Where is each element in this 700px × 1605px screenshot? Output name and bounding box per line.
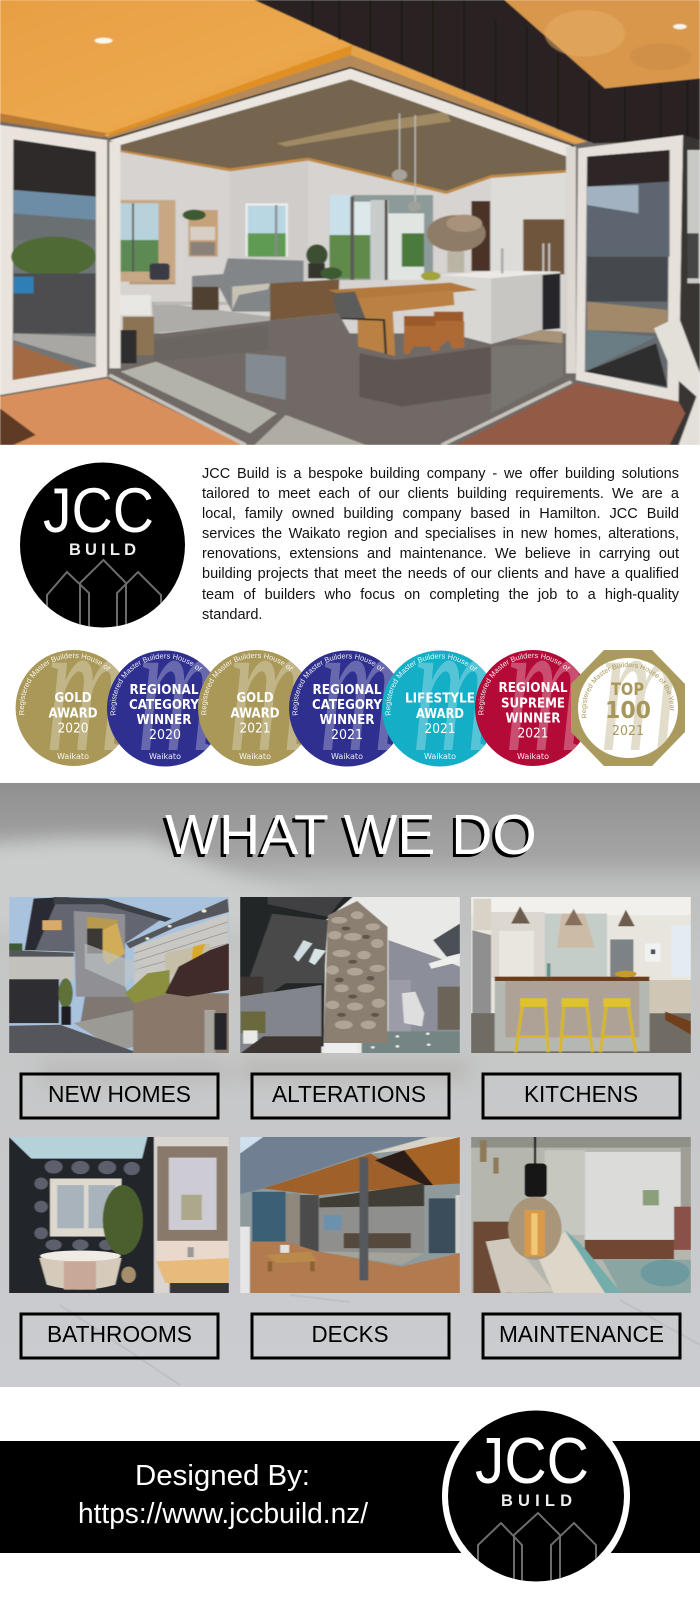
badge: regional supreme winner 2021: WINNER (506, 712, 560, 727)
badge: gold award 2020: GOLD (54, 691, 92, 706)
badge: regional category winner 2020 (107, 650, 211, 766)
interior ceiling (121, 78, 567, 193)
badge: lifestyle award 2021: Waikato (424, 752, 456, 761)
badge: gold award 2020: AWARD (48, 707, 98, 722)
button: kitchens: KITCHENS (524, 1081, 638, 1107)
about text block: standard. (202, 607, 262, 623)
badge: regional supreme winner 2021: REGIONAL (498, 681, 568, 696)
left door (0, 125, 107, 395)
shelf niche (188, 210, 218, 257)
badge: gold award 2021: AWARD (230, 707, 280, 722)
badge: regional category winner 2021: Waikato (331, 752, 363, 761)
about text block: building projects that meet the needs of our clients and have a qualified (202, 566, 679, 582)
sofa (192, 258, 304, 312)
badge: gold award 2020: Registered Master Builders House of (19, 652, 111, 715)
about text block: team of builders who focus on completing the job to a high-quality (202, 587, 679, 603)
button: alterations: ALTERATIONS (272, 1081, 426, 1107)
about text block: JCC Build is a bespoke building company - we offer building solutions (202, 466, 679, 482)
window left (120, 200, 175, 282)
badge: regional category winner 2020: CATEGORY (129, 698, 200, 713)
badge: gold award 2021: 2021 (240, 721, 270, 737)
badge: lifestyle award 2021: AWARD (416, 707, 464, 722)
badge: gold award 2021 (198, 650, 302, 766)
badge: gold award 2021: Registered Master Builders House of (201, 652, 294, 715)
photo: kitchens (471, 897, 691, 1053)
rug (152, 302, 270, 333)
fascia and head frame (350, 45, 587, 144)
about text block: renovations, extensions and maintenance. We believe in carrying out (202, 546, 679, 562)
footer credit text (78, 1460, 369, 1530)
about text block: services the Waikato region and specialises in new homes, alterations, (202, 526, 679, 542)
heading: what we do: WHAT WE DO (165, 803, 537, 867)
badge: top 100 2021: TOP (611, 680, 644, 700)
badge: regional category winner 2020: Registered Master Builders House of (110, 653, 202, 716)
button: bathrooms: BATHROOMS (47, 1321, 192, 1347)
badge: regional supreme winner 2021: 2021 (518, 726, 548, 742)
button: maintenance (483, 1314, 680, 1358)
badge: regional category winner 2021: 2021 (331, 727, 363, 743)
about text block: local, family owned building company based in Hamilton. JCC Build (202, 506, 679, 522)
badge: lifestyle award 2021: 2021 (424, 721, 456, 737)
badge: regional supreme winner 2021: SUPREME (501, 697, 565, 712)
photo: alterations (240, 897, 460, 1053)
button: decks (252, 1314, 449, 1358)
button: bathrooms (21, 1314, 218, 1358)
button: kitchens (483, 1074, 680, 1118)
badge: regional category winner 2020: WINNER (136, 713, 192, 728)
badge: regional supreme winner 2021: Waikato (517, 752, 549, 761)
footer logo: JCC Build: JCC (475, 1424, 589, 1497)
badge: top 100 2021: 2021 (612, 723, 644, 739)
about text block (202, 466, 679, 623)
dark door and fridge (471, 201, 490, 271)
stools (404, 316, 440, 326)
island (440, 272, 560, 344)
logo: JCC Build: BUILD (69, 541, 136, 559)
photo: maintenance (471, 1137, 691, 1293)
footer credit text: Designed By: (135, 1460, 310, 1492)
photo: bathrooms (9, 1137, 229, 1293)
photo: decks (240, 1137, 460, 1293)
badge: regional supreme winner 2021 (475, 650, 580, 766)
badge: lifestyle award 2021: m (412, 582, 492, 792)
right door (576, 135, 683, 402)
badge: lifestyle award 2021: LIFESTYLE (405, 692, 475, 707)
ceiling left (0, 0, 353, 137)
logo: JCC Build: JCC (43, 476, 154, 546)
dining table (328, 283, 478, 302)
button: decks: DECKS (312, 1321, 388, 1347)
badge: gold award 2021: Waikato (239, 752, 271, 761)
logo: JCC Build (20, 462, 185, 630)
footer logo: JCC Build (442, 1402, 630, 1590)
button: new homes (21, 1074, 218, 1118)
badge: regional category winner 2021: REGIONAL (312, 683, 382, 698)
footer credit text: https://www.jccbuild.nz/ (78, 1498, 369, 1530)
badge: lifestyle award 2021 (382, 650, 487, 766)
footer band (0, 1441, 700, 1553)
dark cladding (254, 0, 700, 143)
sliding doors to garden (329, 195, 433, 280)
badge: gold award 2020: Waikato (57, 752, 89, 761)
badge: regional supreme winner 2021: Registered Master Builders House of (478, 652, 570, 715)
chair (654, 317, 700, 445)
window two (246, 203, 288, 257)
badge: regional category winner 2021: WINNER (320, 713, 374, 728)
panel: what we do background (0, 783, 700, 1387)
about text block: tailored to meet each of our clients building requirements. We are a (202, 486, 679, 502)
badge: gold award 2021: GOLD (236, 691, 274, 706)
interior back wall (121, 147, 566, 333)
footer logo: JCC Build: BUILD (501, 1492, 572, 1510)
badge: lifestyle award 2021: Registered Master Builders House of (385, 653, 478, 716)
badge: regional category winner 2020: 2020 (149, 727, 181, 743)
button: new homes: NEW HOMES (48, 1081, 191, 1107)
badge: gold award 2020: m (46, 582, 126, 792)
button: maintenance: MAINTENANCE (499, 1321, 664, 1347)
dried plant (427, 215, 486, 252)
badge: regional category winner 2021: Registered Master Builders House of (292, 653, 384, 716)
pendant lights (398, 113, 401, 173)
badge: top 100 2021: 100 (605, 698, 651, 724)
badge: regional supreme winner 2021: m (505, 582, 585, 792)
badge: regional category winner 2021 (289, 650, 394, 766)
photo: new homes (9, 897, 229, 1053)
badge: regional category winner 2021: m (319, 582, 399, 792)
polished floor (112, 313, 562, 445)
button: alterations (252, 1074, 449, 1118)
award badges row (16, 650, 685, 766)
decks (0, 378, 243, 445)
basket (123, 317, 154, 355)
wood console (270, 279, 339, 321)
door jambs (109, 142, 121, 368)
plant pot (306, 244, 328, 266)
badge: top 100 2021: Registered Master Builders House of the Year (581, 662, 674, 718)
mat (513, 330, 562, 343)
right edge (670, 135, 700, 445)
badge: top 100 2021 (571, 650, 685, 766)
badge: regional category winner 2020: REGIONAL (130, 683, 198, 698)
right ceiling (504, 0, 700, 88)
badge: regional category winner 2020: Waikato (149, 752, 181, 761)
chair (333, 292, 366, 320)
hero photo: open-plan home through bi-fold doors (0, 0, 700, 445)
badge: regional category winner 2020: m (137, 582, 217, 792)
badge: regional category winner 2021: CATEGORY (312, 698, 383, 713)
badge: gold award 2021: m (228, 582, 308, 792)
badge: gold award 2020: 2020 (58, 721, 88, 737)
badge: gold award 2020 (16, 650, 120, 766)
